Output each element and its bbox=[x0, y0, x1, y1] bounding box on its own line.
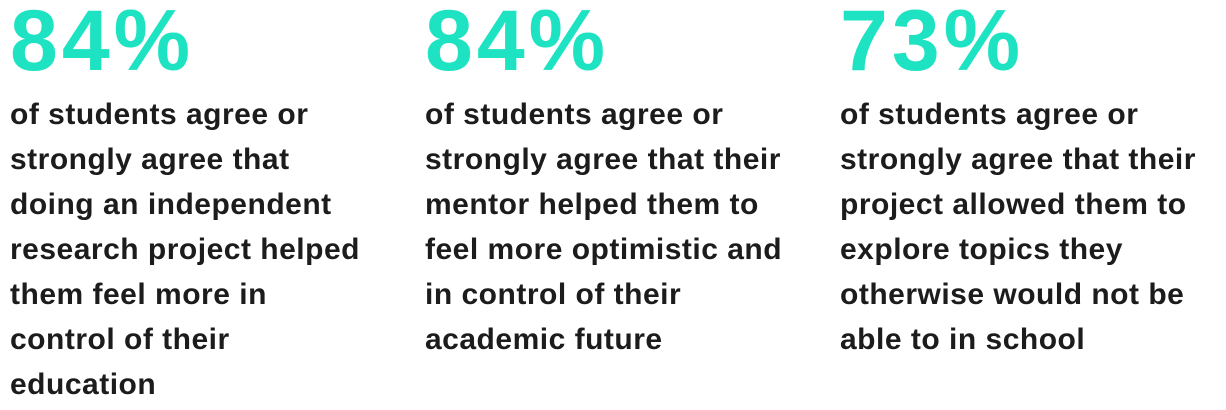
stat description 1: strongly agree that bbox=[10, 143, 290, 176]
stat description 3: explore topics they bbox=[840, 233, 1123, 266]
stat description 3: otherwise would not be bbox=[840, 278, 1184, 311]
stat description 1: them feel more in bbox=[10, 278, 267, 311]
stat description 1: research project helped bbox=[10, 233, 360, 266]
stat description 2 bbox=[425, 98, 782, 356]
stat description 1 bbox=[10, 98, 360, 401]
panel: stat 1 bbox=[10, 0, 360, 401]
stat description 2: of students agree or bbox=[425, 98, 723, 131]
panel: stat 3 bbox=[840, 0, 1196, 356]
stat description 2: mentor helped them to bbox=[425, 188, 759, 221]
stat description 3: of students agree or bbox=[840, 98, 1138, 131]
stat description 2: in control of their bbox=[425, 278, 681, 311]
stat description 1: of students agree or bbox=[10, 98, 308, 131]
stat description 2: strongly agree that their bbox=[425, 143, 781, 176]
stat description 2: feel more optimistic and bbox=[425, 233, 782, 266]
stat description 3: project allowed them to bbox=[840, 188, 1187, 221]
stat description 2: academic future bbox=[425, 323, 663, 356]
stat description 3: strongly agree that their bbox=[840, 143, 1196, 176]
stat description 1: doing an independent bbox=[10, 188, 332, 221]
stat description 3: able to in school bbox=[840, 323, 1085, 356]
panel: stat 2 bbox=[425, 0, 782, 356]
stat description 3 bbox=[840, 98, 1196, 356]
stat description 1: control of their bbox=[10, 323, 230, 356]
stat description 1: education bbox=[10, 368, 156, 401]
